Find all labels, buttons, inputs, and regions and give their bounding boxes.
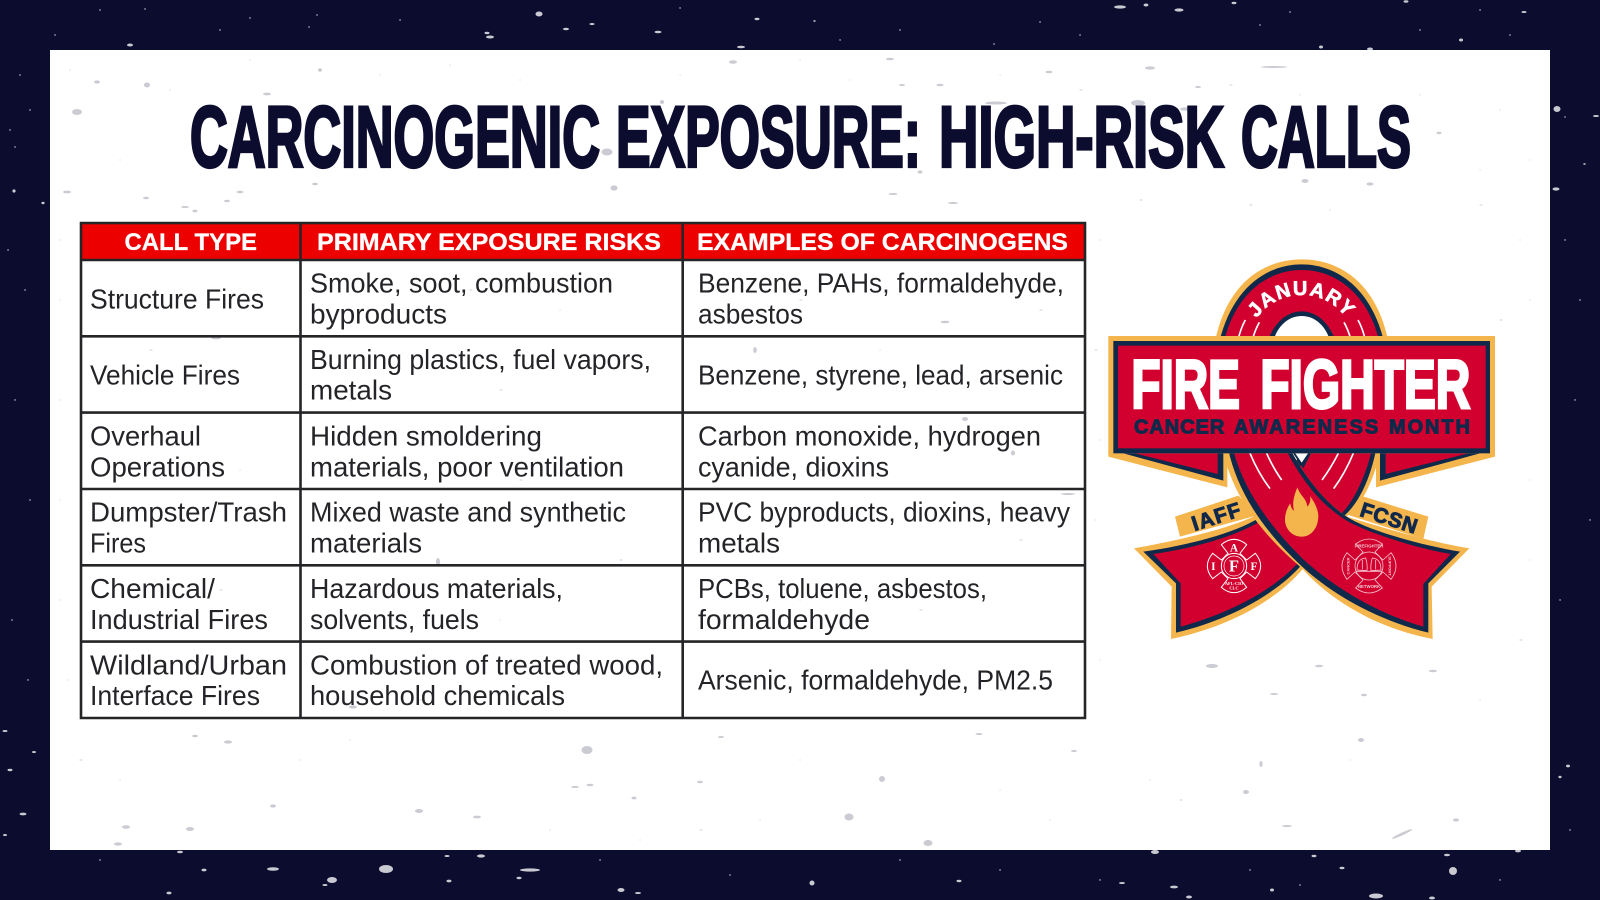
table header row — [81, 223, 1085, 260]
title: CALLS — [1241, 90, 1411, 186]
icon: FCSN emblem: CANCER — [1346, 557, 1351, 575]
row: Chemical/Industrial Fires: formaldehyde — [698, 604, 870, 635]
row: Dumpster/Trash Fires: PVC byproducts, dioxins, heavy — [698, 496, 1070, 528]
row: Structure Fires: Structure Fires — [90, 284, 264, 314]
CANCER AWARENESS MONTH subtitle: MONTH — [1389, 416, 1470, 438]
title: HIGH-RISK — [939, 90, 1224, 186]
row: Structure Fires — [90, 268, 1064, 329]
icon: FCSN emblem: FIREFIGHTER — [1355, 543, 1384, 548]
table header row: PRIMARY EXPOSURE RISKS — [317, 229, 661, 256]
CANCER AWARENESS MONTH subtitle — [1134, 416, 1470, 438]
back ribbon band and IAFF tail — [1134, 450, 1381, 639]
row: Vehicle Fires: Vehicle Fires — [90, 360, 240, 390]
icon: IAFF emblem: I — [1211, 561, 1216, 573]
title: CARCINOGENIC — [190, 90, 600, 186]
row: Chemical/Industrial Fires: Hazardous materials, — [310, 573, 563, 604]
row: Structure Fires: Benzene, PAHs, formaldehyde, — [698, 268, 1064, 299]
row: Wildland/Urban Interface Fires: Wildland/Urban — [90, 649, 287, 680]
logo banner — [1108, 336, 1495, 453]
icon: FCSN emblem — [1342, 539, 1396, 593]
title: EXPOSURE: — [616, 90, 921, 186]
row: Wildland/Urban Interface Fires: Combustion of treated wood, — [310, 649, 663, 680]
row: Wildland/Urban Interface Fires: Interface Fires — [90, 680, 260, 711]
FIRE FIGHTER wordmark — [1131, 346, 1470, 423]
banner tails — [1108, 448, 1495, 487]
icon: IAFF emblem: CLC — [1229, 585, 1239, 590]
table header row: EXAMPLES OF CARCINOGENS — [697, 229, 1068, 256]
row: Wildland/Urban Interface Fires: household chemicals — [310, 680, 565, 711]
row: Chemical/Industrial Fires: Industrial Fires — [90, 604, 268, 635]
row: Overhaul Operations: Hidden smoldering — [310, 420, 542, 452]
row: Dumpster/Trash Fires — [90, 496, 1070, 558]
row: Chemical/Industrial Fires: Chemical/ — [90, 573, 215, 604]
row: Chemical/Industrial Fires — [90, 573, 987, 635]
front ribbon band and FCSN tail — [1223, 450, 1469, 639]
row: Dumpster/Trash Fires: Dumpster/Trash — [90, 496, 287, 528]
icon: IAFF emblem: F — [1251, 561, 1258, 573]
logo: Fire Fighter Cancer Awareness Month ribbon — [1108, 259, 1495, 639]
JANUARY arc text: JANUARY — [1248, 280, 1356, 317]
table header row: CALL TYPE — [124, 229, 257, 256]
row: Dumpster/Trash Fires: metals — [698, 527, 780, 558]
row: Overhaul Operations: cyanide, dioxins — [698, 452, 889, 482]
row: Overhaul Operations: Overhaul — [90, 420, 201, 452]
icon: FCSN emblem: SUPPORT — [1387, 556, 1392, 576]
icon: IAFF emblem — [1207, 539, 1261, 593]
row: Vehicle Fires — [90, 344, 1063, 406]
row: Overhaul Operations: Carbon monoxide, hydrogen — [698, 420, 1041, 452]
IAFF label: IAFF — [1189, 498, 1244, 536]
row: Dumpster/Trash Fires: Mixed waste and synthetic — [310, 496, 626, 528]
icon: IAFF emblem: F — [1229, 557, 1239, 576]
row: Overhaul Operations: materials, poor ventilation — [310, 452, 624, 482]
row: Wildland/Urban Interface Fires: Arsenic, formaldehyde, PM2.5 — [698, 664, 1053, 695]
icon: IAFF emblem: A — [1230, 542, 1239, 554]
row: Vehicle Fires: Burning plastics, fuel vapors, — [310, 344, 651, 375]
row: Vehicle Fires: Benzene, styrene, lead, arsenic — [698, 360, 1063, 390]
CANCER AWARENESS MONTH subtitle: CANCER — [1134, 416, 1225, 438]
row: Dumpster/Trash Fires: Fires — [90, 527, 146, 558]
row: Structure Fires: asbestos — [698, 298, 803, 329]
CANCER AWARENESS MONTH subtitle: AWARENESS — [1234, 416, 1378, 438]
table: call types, exposure risks, carcinogens — [81, 223, 1085, 718]
FIRE FIGHTER wordmark: FIRE — [1131, 346, 1240, 423]
icon: FCSN emblem: NETWORK — [1358, 584, 1381, 589]
row: Overhaul Operations: Operations — [90, 452, 225, 482]
ribbon loop — [1216, 259, 1387, 336]
row: Overhaul Operations — [90, 420, 1041, 482]
icon: IAFF emblem: AFL-CIO — [1225, 581, 1244, 586]
row: Chemical/Industrial Fires: solvents, fuels — [310, 604, 479, 635]
title — [190, 90, 1411, 186]
icon: flame — [1285, 487, 1318, 537]
row: Structure Fires: byproducts — [310, 298, 447, 329]
row: Wildland/Urban Interface Fires — [90, 649, 1053, 711]
row: Vehicle Fires: metals — [310, 375, 392, 406]
row: Structure Fires: Smoke, soot, combustion — [310, 268, 613, 299]
table grid lines — [81, 223, 1085, 718]
FCSN label strip: FCSN — [1357, 498, 1420, 538]
row: Dumpster/Trash Fires: materials — [310, 527, 422, 558]
row: Chemical/Industrial Fires: PCBs, toluene, asbestos, — [698, 573, 987, 604]
FIRE FIGHTER wordmark: FIGHTER — [1260, 346, 1470, 423]
